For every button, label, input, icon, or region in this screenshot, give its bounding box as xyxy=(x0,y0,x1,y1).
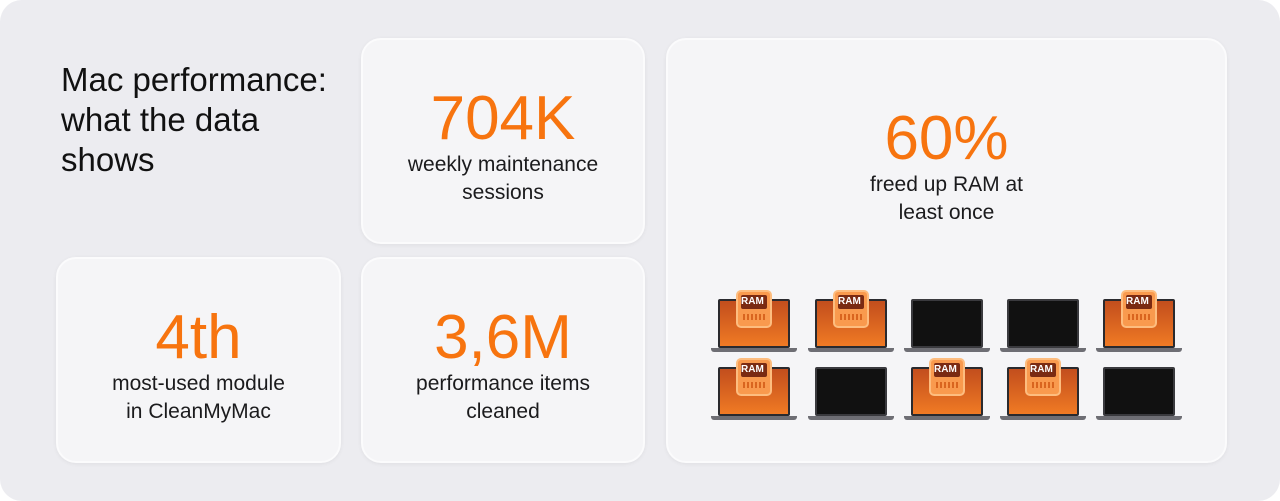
laptops grid: RAM xyxy=(741,296,764,307)
card: 60%: least once xyxy=(899,201,994,224)
laptops grid: RAM xyxy=(934,364,957,375)
card: 3,6M: cleaned xyxy=(466,400,540,423)
card: 704K: 704K xyxy=(431,84,575,153)
card: 60% xyxy=(666,38,1227,463)
card: 704K: weekly maintenance xyxy=(408,153,598,176)
card: 4th: in CleanMyMac xyxy=(126,400,271,423)
card: 4th: most-used module xyxy=(112,372,285,395)
card: 60%: freed up RAM at xyxy=(870,173,1023,196)
laptops grid: RAM xyxy=(1030,364,1053,375)
laptops grid: RAM xyxy=(741,364,764,375)
card: 704K xyxy=(361,38,645,244)
title: Mac performance: xyxy=(61,61,327,98)
title: what the data xyxy=(61,101,259,138)
card: 3,6M: performance items xyxy=(416,372,590,395)
laptops grid: RAM xyxy=(1126,296,1149,307)
card: 3,6M xyxy=(361,257,645,463)
card: 4th xyxy=(56,257,341,463)
card: 704K: sessions xyxy=(462,181,544,204)
card: 60%: 60% xyxy=(884,104,1009,173)
laptops grid xyxy=(711,290,1182,420)
title: shows xyxy=(61,141,155,178)
title xyxy=(61,61,327,178)
laptops grid: RAM xyxy=(838,296,861,307)
card: 4th: 4th xyxy=(155,303,242,372)
card: 3,6M: 3,6M xyxy=(434,303,572,372)
